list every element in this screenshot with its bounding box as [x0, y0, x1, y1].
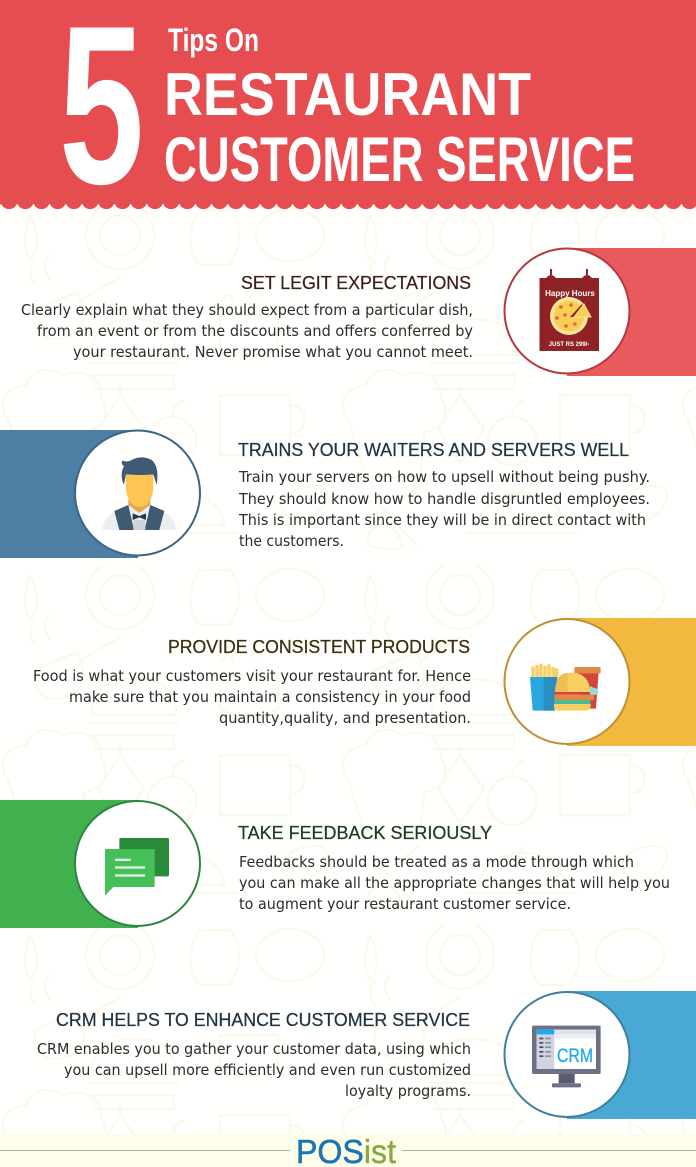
icon: happy hours pizza poster: JUST RS 299/-: [549, 342, 589, 348]
body text: [21, 301, 473, 361]
green band: [0, 800, 138, 928]
body text: [238, 468, 650, 550]
heading: TRAINS YOUR WAITERS AND SERVERS WELL: [238, 439, 629, 460]
body text: Train your servers on how to upsell without being pushy.: [238, 468, 650, 486]
body text: They should know how to handle disgruntled employees.: [238, 490, 650, 508]
body text: This is important since they will be in direct contact with: [238, 511, 646, 529]
body text: you can make all the appropriate changes that will help you: [239, 874, 670, 892]
heading: PROVIDE CONSISTENT PRODUCTS: [168, 636, 470, 657]
body text: you can upsell more efficiently and even run customized: [64, 1061, 471, 1079]
title: tips on: Tips On: [168, 22, 259, 58]
body text: [33, 667, 471, 727]
header banner: [0, 0, 696, 231]
body text: [239, 853, 670, 913]
background doodle pattern: [0, 205, 696, 1135]
sky blue band: [567, 991, 696, 1119]
heading: TAKE FEEDBACK SERIOUSLY: [238, 822, 492, 843]
heading: CRM HELPS TO ENHANCE CUSTOMER SERVICE: [56, 1009, 470, 1030]
panel: take feedback seriously: [0, 800, 670, 928]
body text: [37, 1040, 471, 1100]
body text: Food is what your customers visit your restaurant for. Hence: [33, 667, 471, 685]
title: restaurant: RESTAURANT: [164, 61, 531, 128]
body text: make sure that you maintain a consistency in your food: [69, 688, 471, 706]
body text: from an event or from the discounts and offers conferred by: [37, 322, 473, 340]
panel: provide consistent products: [33, 618, 696, 746]
footer: [0, 1134, 696, 1167]
icon: happy hours pizza poster: Happy Hours: [545, 289, 595, 298]
body text: Feedbacks should be treated as a mode through which: [239, 853, 634, 871]
body text: your restaurant. Never promise what you cannot meet.: [73, 343, 473, 361]
icon: crm monitor: CRM: [557, 1046, 593, 1067]
blue band: [0, 430, 138, 558]
body text: loyalty programs.: [345, 1082, 471, 1100]
body text: quantity,quality, and presentation.: [219, 709, 471, 727]
panel: crm helps: [37, 991, 696, 1119]
panel: set legit expectations: [21, 248, 696, 376]
icon: chat bubbles: [75, 801, 200, 926]
panel: trains your waiters: [0, 430, 650, 558]
yellow band: [567, 618, 696, 746]
heading: SET LEGIT EXPECTATIONS: [241, 272, 471, 293]
body text: to augment your restaurant customer service.: [239, 895, 571, 913]
icon: waiter: [75, 430, 200, 556]
icon: crm monitor: [504, 992, 630, 1117]
body text: CRM enables you to gather your customer data, using which: [37, 1040, 471, 1058]
body text: Clearly explain what they should expect from a particular dish,: [21, 301, 473, 319]
icon: happy hours pizza poster: [504, 248, 630, 374]
red band: [567, 248, 696, 376]
body text: the customers.: [239, 532, 344, 550]
icon: fast food: [504, 619, 630, 744]
